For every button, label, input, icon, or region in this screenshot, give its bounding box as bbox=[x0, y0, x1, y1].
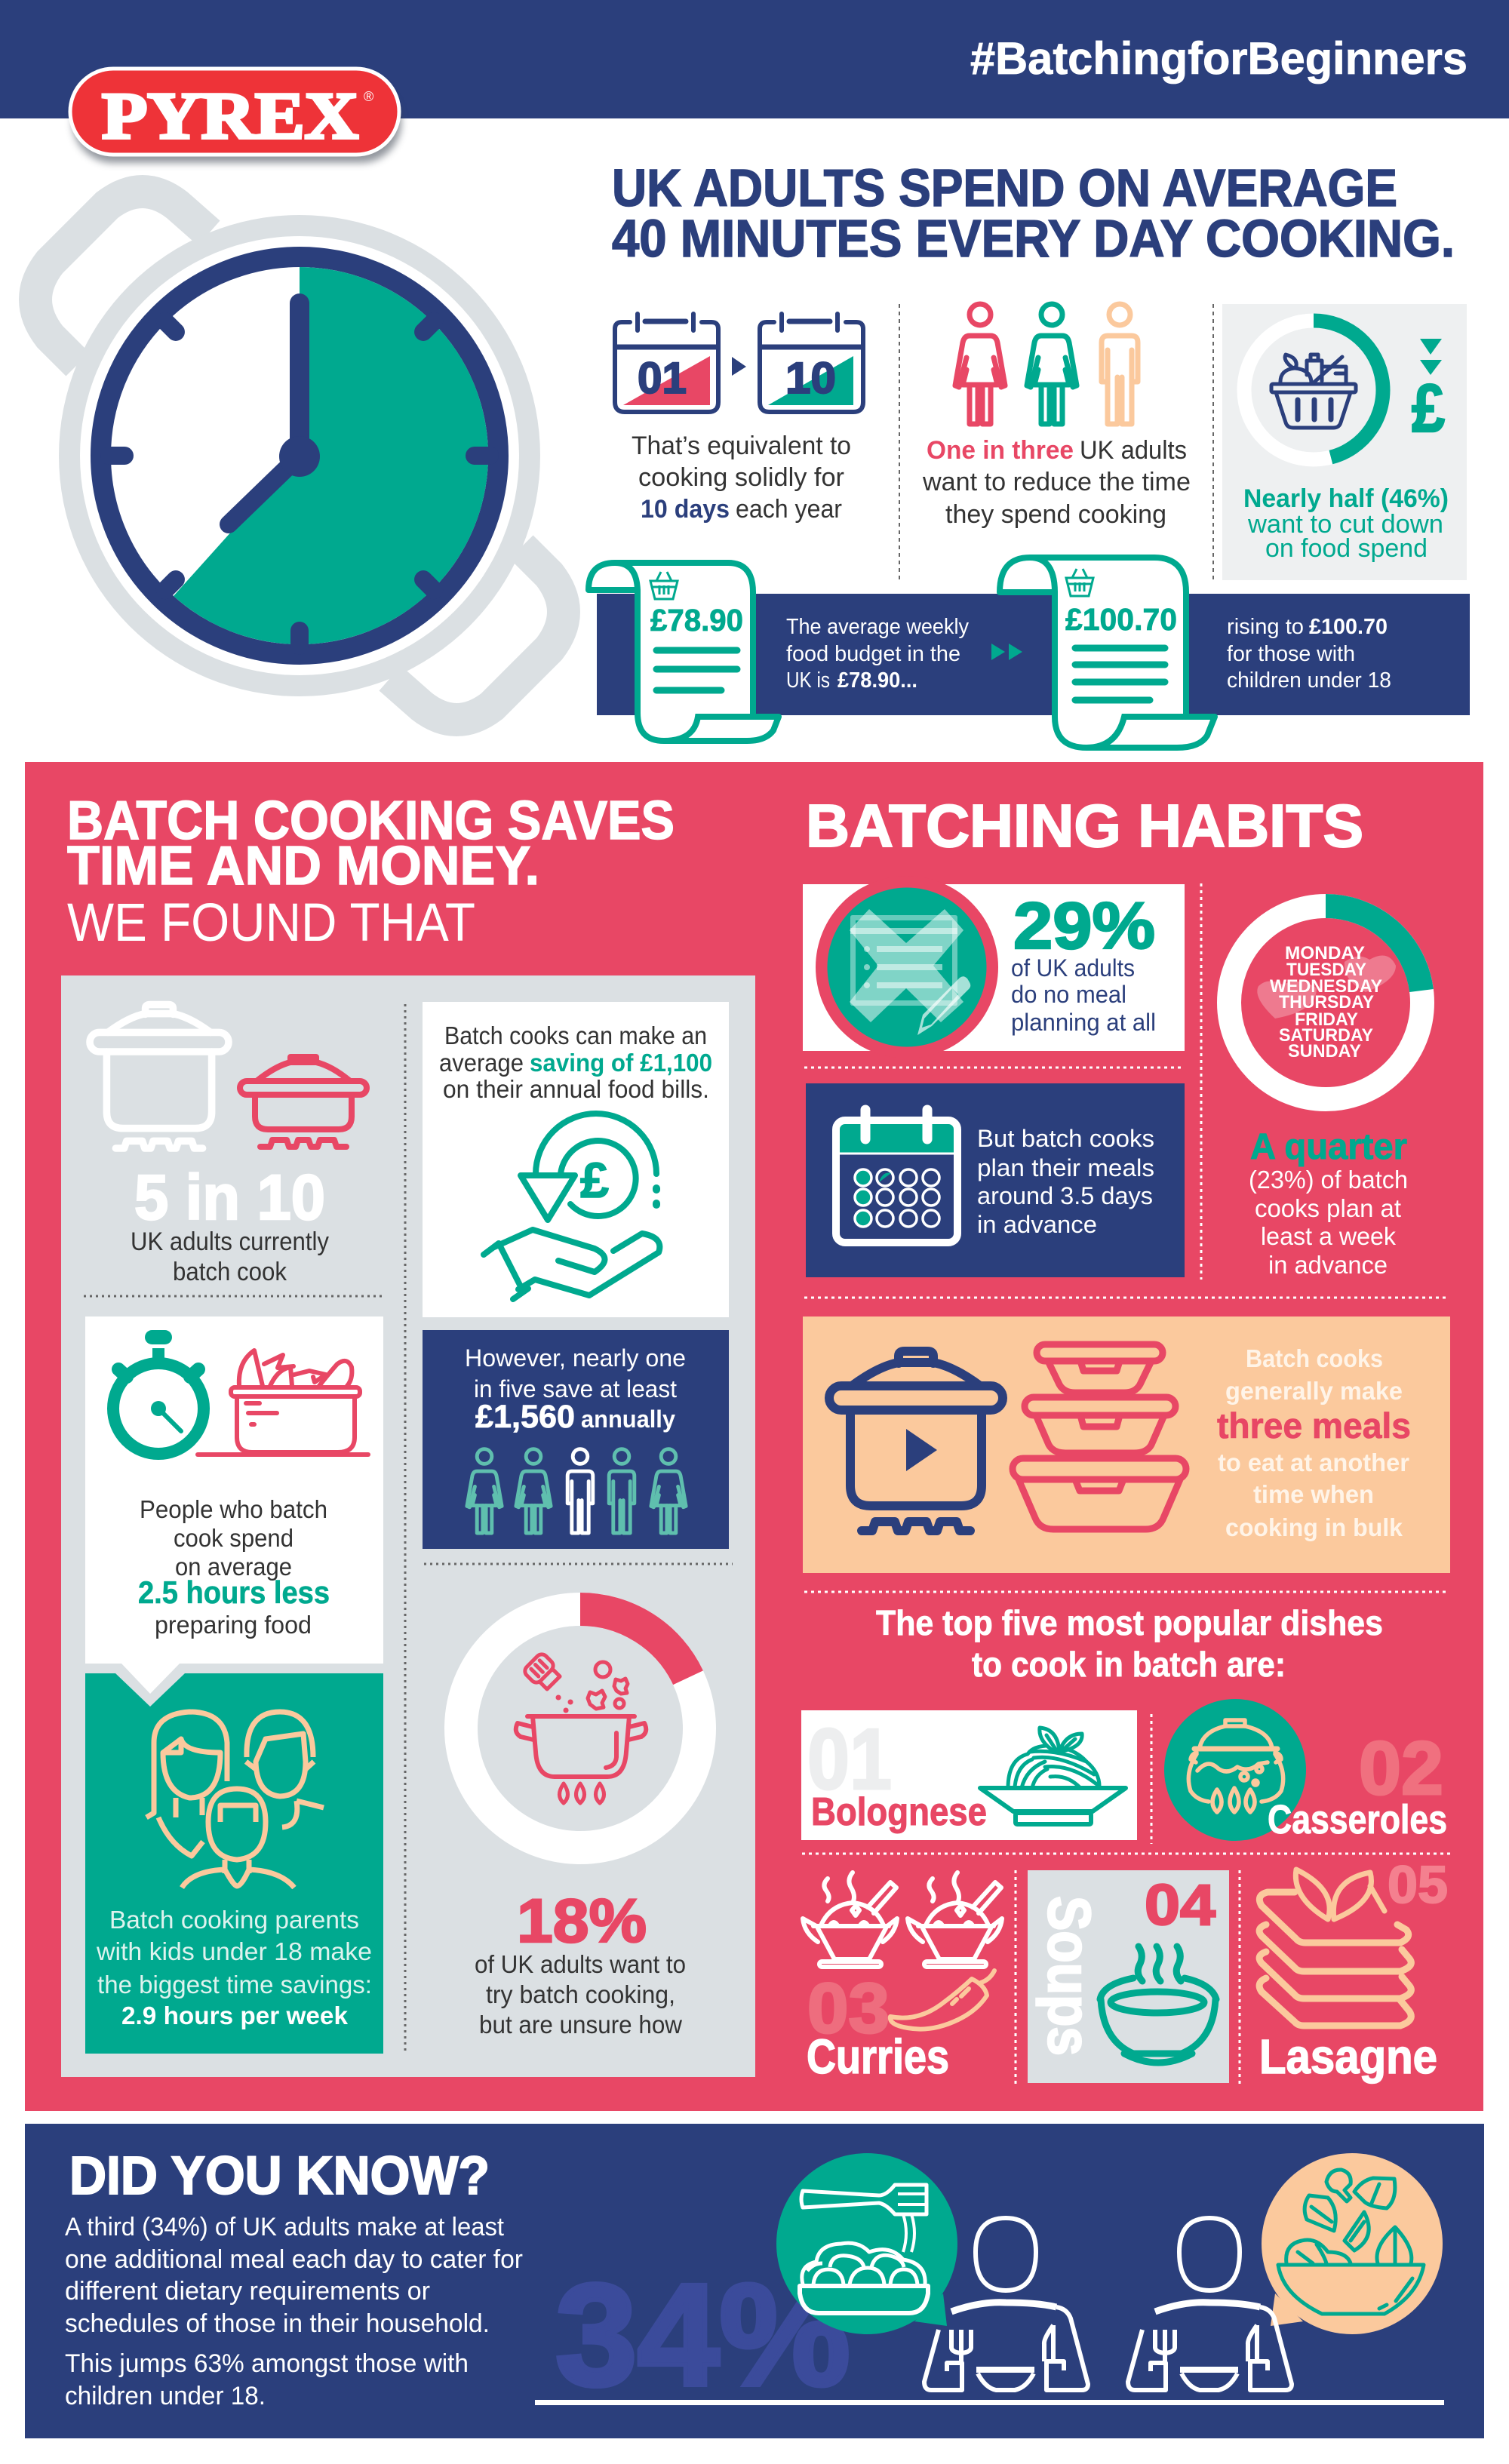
text: parents: 2.9 hours per week bbox=[121, 2002, 349, 2029]
icon: calendars 01 to 10 bbox=[615, 314, 863, 412]
text: three meals bbox=[1217, 1344, 1411, 1541]
dish 04: Soups: 04 bbox=[1145, 1873, 1215, 1937]
text: three meals: to eat at another bbox=[1218, 1449, 1409, 1476]
icon: curry bowls bbox=[803, 1873, 1002, 1967]
heading: batching habits: BATCHING HABITS bbox=[806, 792, 1363, 859]
stat: 18 percent: try batch cooking, bbox=[486, 1980, 675, 2008]
stat: 18 percent: of UK adults want to bbox=[475, 1950, 686, 1978]
icon: calendars 01 to 10: 10 bbox=[785, 354, 836, 403]
icon: basket bbox=[1271, 355, 1356, 428]
text: a quarter: (23%) of batch bbox=[1249, 1166, 1408, 1194]
dish 03: Curries bbox=[803, 1873, 1002, 2084]
heading: top five dishes: to cook in batch are: bbox=[972, 1645, 1286, 1684]
text: saving bbox=[439, 1022, 712, 1103]
panel: findings grey bbox=[61, 975, 755, 2077]
main title: UK ADULTS SPEND ON AVERAGE bbox=[612, 158, 1397, 217]
panel: three meals bbox=[803, 1316, 1450, 1573]
panel: one in five bbox=[423, 1330, 729, 1549]
icon: food bowl bbox=[198, 1350, 368, 1455]
table line bbox=[535, 2400, 1444, 2405]
text: three meals: generally make bbox=[1225, 1377, 1403, 1405]
icon: stacked containers bbox=[1013, 1344, 1186, 1529]
icon: calendar bbox=[836, 1110, 957, 1243]
dish 01: Bolognese: 01 bbox=[807, 1712, 892, 1808]
text: parents bbox=[96, 1906, 372, 2029]
stat: 18 percent: 18% bbox=[517, 1887, 647, 1956]
donut 46 percent bbox=[1244, 321, 1383, 459]
text: third of adults: A third (34%) of UK adults make at least bbox=[65, 2213, 505, 2241]
text: one in three: want to reduce the time bbox=[922, 468, 1191, 496]
stat: 5 in 10: UK adults currently bbox=[131, 1227, 329, 1256]
icon: clock bbox=[35, 192, 564, 720]
icon: white pot bbox=[90, 1005, 229, 1148]
text: ten days: cooking solidly for bbox=[638, 463, 844, 492]
dish 03: Curries: Curries bbox=[807, 2029, 949, 2084]
text: three meals: time when bbox=[1253, 1480, 1374, 1508]
text: third of adults: This jumps 63% amongst those with bbox=[65, 2349, 469, 2378]
chart: 18 percent donut bbox=[461, 1609, 699, 1848]
icon: navy pot bbox=[829, 1351, 1003, 1531]
dish 04: Soups: Soups bbox=[1036, 1896, 1103, 2056]
icon: spaghetti plate bbox=[980, 1728, 1126, 1824]
icon: three people bbox=[955, 304, 1138, 424]
icon: crossed planner bbox=[850, 909, 970, 1035]
text: third of adults: children under 18. bbox=[65, 2382, 266, 2410]
text: 2.5 hours less: cook spend bbox=[174, 1524, 294, 1552]
icon: soup bowl bbox=[1100, 1946, 1216, 2063]
text: nearly half bbox=[1243, 484, 1449, 563]
icon: stopwatch bbox=[113, 1330, 204, 1454]
arrow bbox=[991, 644, 1022, 660]
text: a quarter: cooks plan at bbox=[1255, 1194, 1401, 1222]
icon: receipt 78.90: £78.90 bbox=[650, 603, 743, 638]
text: average budget: food budget in the bbox=[786, 642, 960, 666]
text: parents: Batch cooking parents bbox=[109, 1906, 359, 1934]
panel: saving 1100: £ bbox=[580, 1152, 609, 1208]
stat: 5 in 10 bbox=[131, 1162, 329, 1286]
text: parents: the biggest time savings: bbox=[97, 1971, 372, 1999]
dish 01: Bolognese bbox=[801, 1710, 1137, 1840]
text: nearly half: Nearly half (46%) bbox=[1243, 484, 1449, 513]
dish 04: Soups bbox=[1028, 1870, 1229, 2083]
text: one in five bbox=[465, 1344, 686, 1435]
text: plan their meals: in advance bbox=[977, 1211, 1097, 1238]
heading: batch cooking saves: WE FOUND THAT bbox=[67, 893, 475, 953]
text: parents: with kids under 18 make bbox=[96, 1937, 372, 1965]
stat: 29 percent: do no meal bbox=[1011, 981, 1126, 1008]
panel: food spend bbox=[1222, 304, 1467, 580]
hashtag: #BatchingforBeginners bbox=[970, 33, 1468, 84]
text: third of adults: one additional meal each day to cater for bbox=[65, 2245, 523, 2274]
main title: 40 MINUTES EVERY DAY COOKING. bbox=[612, 209, 1455, 268]
panel: time saved bbox=[85, 1316, 383, 2054]
days of the week: SATURDAY bbox=[1279, 1025, 1373, 1046]
stat: 5 in 10: batch cook bbox=[173, 1258, 287, 1286]
text: plan their meals: around 3.5 days bbox=[977, 1182, 1153, 1209]
text: third of adults: different dietary requirements or bbox=[65, 2277, 430, 2306]
days of the week: TUESDAY bbox=[1286, 960, 1366, 980]
text: average budget: UK is bbox=[786, 668, 830, 693]
text: rising budget bbox=[1227, 615, 1391, 693]
text: plan their meals: But batch cooks bbox=[977, 1125, 1154, 1152]
text: one in five: However, nearly one bbox=[465, 1344, 686, 1372]
stat: 5 in 10: 5 in 10 bbox=[134, 1162, 325, 1233]
icon: seasoned pot bbox=[516, 1652, 646, 1803]
heading: top five dishes: The top five most popular dishes bbox=[876, 1603, 1383, 1642]
icon: receipt 78.90 bbox=[589, 563, 779, 741]
stat: 29 percent: planning at all bbox=[1011, 1009, 1156, 1036]
text: rising budget: rising to bbox=[1227, 615, 1304, 639]
illustration: two diners bbox=[924, 2218, 1292, 2390]
text: saving: average bbox=[439, 1049, 524, 1077]
text: one in three: One in three bbox=[927, 436, 1074, 465]
stat: 18 percent bbox=[475, 1887, 686, 2038]
text: saving: Batch cooks can make an bbox=[444, 1022, 707, 1049]
panel: batch cooking (red) bbox=[25, 762, 1483, 2111]
days of the week: THURSDAY bbox=[1279, 992, 1374, 1012]
text: 2.5 hours less: People who batch bbox=[140, 1495, 327, 1523]
text: saving: saving of £1,100 bbox=[530, 1049, 712, 1077]
text: rising budget: £100.70 bbox=[1309, 615, 1388, 639]
text: third of adults: schedules of those in their household. bbox=[65, 2309, 490, 2338]
text: 2.5 hours less: on average bbox=[175, 1553, 292, 1581]
text: one in five: £1,560 bbox=[475, 1399, 575, 1435]
text: rising budget: for those with bbox=[1227, 642, 1355, 666]
icon: casserole bbox=[1188, 1720, 1283, 1812]
text: one in three: they spend cooking bbox=[945, 500, 1166, 529]
speech bubble: spaghetti bbox=[776, 2153, 957, 2334]
text: ten days: That’s equivalent to bbox=[632, 432, 851, 460]
text: one in three bbox=[922, 436, 1191, 529]
days of the week: WEDNESDAY bbox=[1270, 976, 1382, 997]
dish 02: Casseroles: 02 bbox=[1359, 1726, 1443, 1811]
dish 05: Lasagne bbox=[1259, 1855, 1448, 2084]
panel: food spend: £ bbox=[1412, 371, 1445, 447]
heading: did you know: DID YOU KNOW? bbox=[69, 2146, 490, 2206]
text: 2.5 hours less: 2.5 hours less bbox=[138, 1575, 330, 1610]
text: plan their meals bbox=[977, 1125, 1154, 1238]
panel: weekly food budget bar bbox=[597, 594, 1470, 715]
dish 05: Lasagne: 05 bbox=[1388, 1855, 1448, 1914]
dish 03: Curries: 03 bbox=[807, 1968, 890, 2048]
icon: money back bbox=[484, 1114, 659, 1299]
text: a quarter: in advance bbox=[1268, 1251, 1388, 1279]
text: saving: on their annual food bills. bbox=[443, 1075, 709, 1103]
text: 2.5 hours less bbox=[138, 1495, 330, 1639]
days of the week: SUNDAY bbox=[1288, 1041, 1361, 1061]
text: 2.5 hours less: preparing food bbox=[155, 1611, 312, 1639]
text: third of adults bbox=[65, 2213, 523, 2410]
stat: 18 percent: but are unsure how bbox=[479, 2011, 682, 2038]
icon: calendars 01 to 10: 01 bbox=[638, 354, 687, 403]
header band bbox=[0, 0, 1509, 118]
heading: batch cooking saves: TIME AND MONEY. bbox=[67, 836, 539, 896]
text: plan their meals: plan their meals bbox=[977, 1154, 1154, 1181]
icon: receipt 100.70: £100.70 bbox=[1065, 602, 1177, 637]
icon: pink pot bbox=[240, 1057, 367, 1147]
text: ten days: 10 days bbox=[641, 495, 730, 524]
icon: spaghetti bowl bbox=[800, 2185, 928, 2313]
text: average budget bbox=[786, 615, 969, 693]
days of the week bbox=[1270, 943, 1382, 1061]
text: average budget: £78.90... bbox=[837, 668, 917, 693]
main title bbox=[612, 158, 1455, 268]
icon: receipt 100.70 bbox=[1000, 558, 1215, 748]
text: three meals: Batch cooks bbox=[1246, 1344, 1383, 1372]
text: three meals: three meals bbox=[1217, 1406, 1411, 1446]
icon: salad bowl bbox=[1278, 2170, 1424, 2314]
text: nearly half: on food spend bbox=[1265, 534, 1428, 563]
text: one in five: in five save at least bbox=[474, 1375, 677, 1403]
text: nearly half: want to cut down bbox=[1247, 510, 1443, 539]
heading: top five dishes bbox=[876, 1603, 1383, 1684]
stat: 34 percent: 34% bbox=[555, 2254, 850, 2416]
panel: did you know bbox=[25, 2124, 1484, 2438]
dish 01: Bolognese: Bolognese bbox=[811, 1790, 987, 1834]
days of the week: FRIDAY bbox=[1295, 1009, 1358, 1030]
text: a quarter: least a week bbox=[1261, 1222, 1396, 1250]
heading: batch cooking saves bbox=[67, 791, 675, 953]
heading: batch cooking saves: BATCH COOKING SAVES bbox=[67, 791, 675, 851]
text: rising budget: children under 18 bbox=[1227, 668, 1391, 693]
Pyrex logo: PYREX bbox=[102, 80, 358, 153]
text: three meals: cooking in bulk bbox=[1225, 1513, 1403, 1541]
text: one in five: annually bbox=[581, 1406, 675, 1433]
text: ten days: each year bbox=[736, 495, 842, 524]
icon: chilli bbox=[890, 1971, 994, 2029]
dish 05: Lasagne: Lasagne bbox=[1259, 2029, 1437, 2084]
text: one in three: UK adults bbox=[1080, 436, 1187, 465]
dish 02: Casseroles: Casseroles bbox=[1268, 1797, 1447, 1842]
icon: family bbox=[146, 1712, 324, 1888]
chart: quarter donut with days bbox=[1229, 906, 1422, 1099]
text: average budget: The average weekly bbox=[786, 615, 969, 639]
Pyrex logo: ® bbox=[364, 89, 373, 104]
text: a quarter: A quarter bbox=[1250, 1127, 1407, 1167]
speech bubble: salad bbox=[1262, 2153, 1443, 2334]
stat: 29 percent bbox=[1011, 889, 1156, 1036]
panel: saving 1100 bbox=[423, 1002, 729, 1317]
icon: five people bbox=[467, 1449, 686, 1533]
days of the week: MONDAY bbox=[1285, 943, 1365, 963]
panel: no meal planning bbox=[803, 876, 1185, 1058]
text: ten days bbox=[632, 432, 851, 524]
stat: 29 percent: 29% bbox=[1013, 889, 1155, 963]
icon: play triangle bbox=[906, 1429, 937, 1471]
icon: lasagne sheets bbox=[1259, 1870, 1411, 2026]
panel: plan ahead bbox=[806, 1083, 1185, 1277]
text: a quarter bbox=[1249, 1127, 1408, 1279]
stat: 29 percent: of UK adults bbox=[1011, 954, 1135, 982]
Pyrex logo bbox=[70, 69, 401, 163]
dish 02: Casseroles bbox=[1164, 1699, 1447, 1842]
